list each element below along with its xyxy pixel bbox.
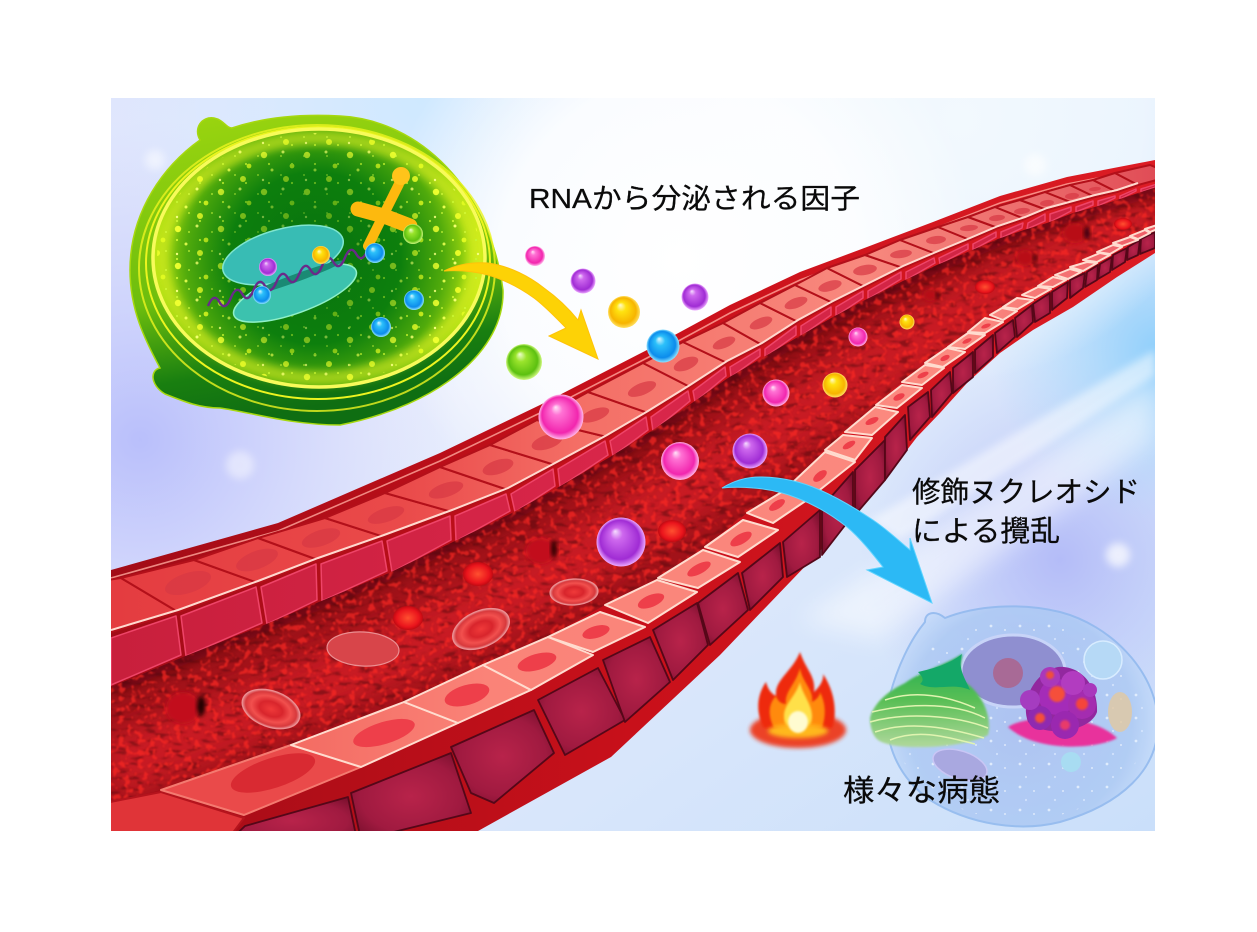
- yellow arrow: [444, 263, 598, 359]
- mitochondrion: [932, 748, 988, 782]
- green source cell: [130, 115, 503, 425]
- label: modified nucleoside perturbation: 修飾ヌクレオシド: [912, 476, 1140, 509]
- cell bright ring: [153, 129, 485, 387]
- organelle: [1108, 692, 1132, 732]
- target cell body: [887, 606, 1158, 826]
- upper wall front faces: [111, 179, 1173, 685]
- red blood cells: [237, 578, 599, 736]
- molecules in cell: [253, 224, 424, 337]
- cell interior: [154, 130, 484, 386]
- upper tile nuclei: [162, 186, 1101, 600]
- label: various pathologies: 様々な病態: [843, 775, 1000, 808]
- vesicle: [1084, 641, 1122, 679]
- lower wall surface tiles: [60, 224, 1165, 850]
- icon: inflammation flame: [750, 652, 846, 748]
- label: modified nucleoside perturbation: による攪乱: [912, 515, 1060, 548]
- RNA strand: [208, 250, 368, 306]
- lower tile nuclei: [227, 322, 991, 801]
- upper wall highlight line: [111, 167, 1155, 578]
- nucleolus: [993, 658, 1023, 688]
- blue arrow: [722, 477, 932, 603]
- label: secreted factor: RNAから分泌される因子: [529, 183, 860, 214]
- upper tile pale edge: [111, 183, 1138, 630]
- wall openings: [166, 223, 1090, 724]
- secreted molecules: [506, 246, 914, 566]
- cell inner glow: [163, 138, 475, 378]
- small vesicle: [1061, 752, 1081, 772]
- upper wall top tiles: [111, 164, 1155, 633]
- icon: fibrosis green fibres: [870, 654, 989, 747]
- cell sparkles: [157, 133, 481, 383]
- blue target cell: [887, 606, 1158, 826]
- nucleus: [222, 224, 358, 323]
- label: modified nucleoside perturbation: [912, 476, 1140, 548]
- cell outer body: [130, 115, 503, 425]
- blood vessel: [111, 160, 1155, 831]
- lumen: [111, 180, 1160, 810]
- target cell nucleus: [961, 635, 1065, 707]
- lower wall front cells: [225, 232, 1155, 845]
- Y molecule: [358, 167, 410, 246]
- icon: tumor cluster: [1008, 667, 1117, 747]
- platelets: [393, 218, 1132, 630]
- vessel body: [111, 160, 1155, 831]
- cell rim lines: [139, 125, 495, 411]
- background: [111, 98, 1155, 831]
- target cell speckles: [904, 624, 1143, 815]
